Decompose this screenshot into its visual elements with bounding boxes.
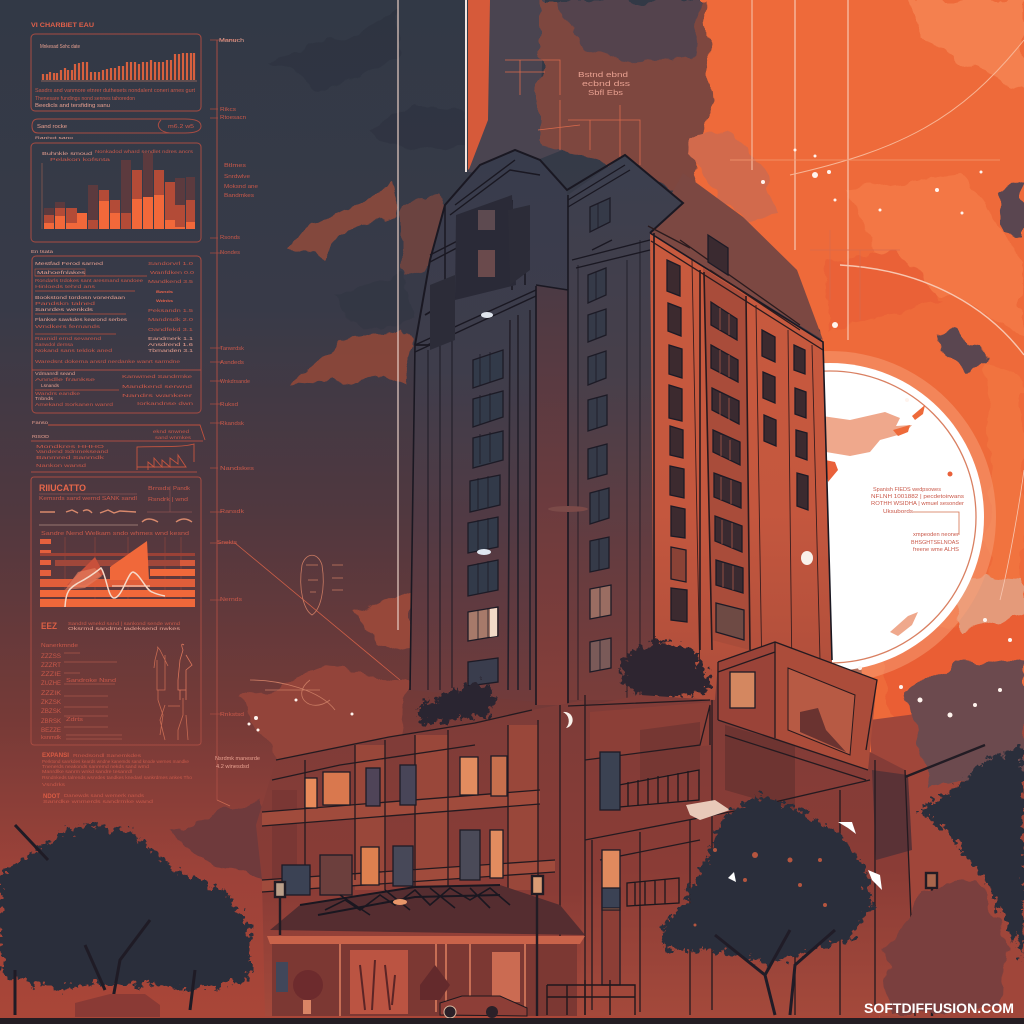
dark bars bbox=[44, 153, 195, 229]
timeline rail with labels: Asndeds bbox=[220, 360, 245, 366]
panel: area and band chart bbox=[31, 477, 201, 745]
trees: background shade trees right bbox=[885, 880, 1005, 1010]
timeline rail with labels: Rsonds bbox=[220, 235, 241, 241]
tree trunks right bbox=[715, 930, 835, 1015]
timeline rail with labels bbox=[210, 38, 260, 806]
axis band bbox=[39, 524, 138, 526]
band labels bbox=[40, 539, 51, 576]
patio furniture bbox=[547, 980, 635, 1015]
footer notes bbox=[42, 753, 193, 804]
timeline rail with labels: Rkandsk bbox=[220, 421, 245, 427]
sun callout text: freene wme ALHS bbox=[913, 547, 960, 553]
sky: orange sunset field bbox=[468, 0, 1024, 1024]
tower: windows on right face bbox=[667, 260, 808, 622]
bright bars bbox=[44, 195, 195, 229]
timeline rail with labels: Rikcs bbox=[220, 107, 237, 113]
panel: pill selector: Ranhot sano bbox=[35, 135, 74, 140]
sun disc with ring bbox=[824, 351, 996, 678]
footer notes: Manrdlke sanrm wnkd sandre tesanrdl bbox=[42, 769, 132, 774]
panel: area and band chart: Pandk bbox=[173, 486, 191, 492]
sun callout text: ROTHH WSIDHA | wmuel sesonder bbox=[871, 501, 964, 507]
spec list: BEZZE bbox=[41, 728, 61, 734]
table footer rows bbox=[35, 371, 194, 407]
panel: small sparkline section: sand wnmkes bbox=[155, 435, 191, 440]
lobby: glowing interior bbox=[272, 944, 577, 1016]
lamp posts bbox=[275, 745, 985, 1016]
tower: roof cornices and outlines bbox=[410, 150, 832, 705]
chart heading: RIIUCATTO bbox=[39, 483, 86, 493]
table left rows bbox=[35, 261, 181, 364]
grid lines bbox=[65, 537, 181, 607]
footer notes: Rnedsondl Sanemkdes bbox=[73, 753, 141, 758]
chart subtitle: Mnkesad Sohc date bbox=[40, 44, 80, 50]
sun callout text: NFLNH 1001882 | pecdetoirwans bbox=[871, 494, 965, 500]
table right column: Tbmanden 3.1 bbox=[148, 348, 194, 353]
panel: small sparkline section: Vandend Sdnmekseand bbox=[36, 449, 109, 454]
table footer rows: Anndle frankse bbox=[35, 377, 96, 382]
sky notes above tower: Bstnd ebnd bbox=[578, 72, 628, 79]
panel: small sparkline section: Banmred Sanmdk bbox=[36, 455, 106, 460]
table right column: Wdnks bbox=[156, 298, 174, 303]
spec list: Nanerkmnde bbox=[41, 643, 78, 649]
building: balconies bbox=[619, 770, 699, 906]
spec list: ZBZSK bbox=[41, 709, 61, 715]
watermark: SOFTDIFFUSION.COM bbox=[864, 1000, 1014, 1016]
sky sketch: oval compass bbox=[250, 555, 343, 710]
table right column: Eandmerk 1.1 bbox=[148, 336, 194, 341]
chart title: VI CHARBIET EAU bbox=[31, 23, 94, 29]
table footer rows: Tnbnds bbox=[35, 396, 53, 401]
timeline rail with labels: 4.2 winesdsd bbox=[216, 764, 249, 770]
human figure sketches bbox=[154, 644, 192, 740]
table footer rows: Wandrs eandke bbox=[35, 391, 81, 396]
footer notes: Sanrdke wnmerds sandrmke wand bbox=[43, 799, 154, 804]
bar chart: thin bars bbox=[43, 53, 194, 80]
ground strip bbox=[0, 1018, 1024, 1024]
table footer rows: Nandrs wankeer bbox=[122, 393, 193, 398]
spec list: Sandroke Nsnd bbox=[66, 678, 116, 684]
table left rows: Flankse sawkdes kearond serbes bbox=[35, 317, 127, 322]
table footer rows: Amekand Sorkanen wanrd bbox=[35, 402, 114, 407]
building: structural lines bbox=[262, 642, 915, 1016]
footer notes: NDOT bbox=[43, 794, 60, 800]
spec list: ZBRSK bbox=[41, 719, 61, 725]
tower: central dark face bbox=[568, 155, 683, 700]
table footer rows: Mandkend serwnd bbox=[122, 384, 193, 389]
note row: EEZ bbox=[41, 621, 57, 631]
panel: data table: En tsata bbox=[31, 249, 54, 254]
timeline rail with labels: Nernds bbox=[220, 597, 243, 603]
building: left wing bbox=[256, 700, 585, 1016]
tower: terrace plants right bbox=[620, 640, 712, 700]
panel: line bar chart: Beedicls and tersfiding sanu bbox=[35, 103, 110, 109]
timeline rail with labels: Tanwrdsk bbox=[220, 346, 245, 352]
trend line bbox=[65, 568, 165, 607]
tower: ornate crown dark patch bbox=[430, 195, 530, 350]
tower: left dark face bbox=[410, 150, 567, 705]
parked car left bbox=[75, 994, 160, 1017]
table left rows: Hinloeds tehrd ans bbox=[35, 284, 95, 289]
tower: windows on left face bbox=[468, 350, 503, 686]
overlay lines on sky bbox=[235, 0, 1024, 680]
panel: pill selector: Sand rocke bbox=[37, 124, 67, 130]
panel: area and band chart: Oksrmd sandrne tadeksend nwkes bbox=[68, 626, 180, 631]
canopy: entrance arch bbox=[267, 885, 585, 944]
sky notes above tower: Sbfl Ebs bbox=[588, 90, 624, 97]
table left rows: Mahoefnlakes bbox=[37, 270, 85, 275]
highlights on facade bbox=[548, 506, 813, 820]
tower: right red face bbox=[650, 233, 832, 700]
panel: small sparkline section: RISOD bbox=[32, 434, 49, 439]
panel: pill selector: m6.2 w5 bbox=[168, 124, 194, 130]
tree: left bbox=[0, 825, 250, 990]
sky sketch marks above the tower bbox=[505, 60, 900, 320]
timeline rail with labels: Nandskes bbox=[220, 466, 255, 472]
tree: foreground right bbox=[660, 795, 872, 965]
timeline rail with labels: Snekts bbox=[217, 540, 238, 546]
panel: stacked bar chart: Pelakon kofsnta bbox=[50, 157, 111, 162]
mid bars bbox=[44, 170, 195, 229]
chart bands bbox=[40, 553, 195, 607]
timeline rail with labels: Ransdk bbox=[220, 509, 245, 515]
panel: small sparkline section bbox=[31, 420, 205, 472]
table left rows: Bookstond tordosn vonerdaan bbox=[35, 295, 126, 300]
table left rows: Wndkers fernands bbox=[35, 324, 100, 329]
timeline rail with labels: Rtoesacn bbox=[220, 115, 246, 121]
chart sub text: Kemsrds sand wernd SANK sandl bbox=[39, 496, 137, 502]
table right column: Mandrsdk 2.0 bbox=[148, 317, 194, 322]
footer notes: Rsndnkeds talrends wsnrdes tandkes knedasl sankrdmes ankes Tho bbox=[42, 775, 193, 780]
chart axis bbox=[41, 80, 197, 82]
footer notes: Danewds sand wemerk nands bbox=[64, 793, 144, 798]
panel: small sparkline section: Nankon wansd bbox=[36, 463, 87, 468]
table right column: Bands bbox=[156, 289, 174, 294]
table right column: Mandkend 3.5 bbox=[148, 279, 194, 284]
table right column: Sandorvrl 1.0 bbox=[148, 261, 194, 266]
building: lower right block bbox=[568, 642, 915, 1016]
sky speckles: white dots bbox=[248, 148, 1012, 732]
timeline rail with labels: Snrdwlve bbox=[224, 174, 250, 180]
tower: bay column shade bbox=[703, 268, 750, 650]
table right column: Oandfekd 3.1 bbox=[148, 327, 194, 332]
tree blossoms: right bbox=[694, 848, 827, 926]
footer notes: Vsndrks bbox=[42, 782, 65, 787]
building: terrace plants left bbox=[420, 680, 495, 725]
table right column bbox=[148, 261, 195, 353]
sky notes above tower: ecbnd dss bbox=[582, 81, 631, 88]
sun callout text: BHSGHTSELNOAS bbox=[911, 540, 960, 546]
wave row bbox=[40, 510, 192, 522]
footer notes: Tnenerds neakonds sanremd nekds sand wrnd bbox=[42, 764, 150, 769]
tower: corner strip bbox=[536, 285, 568, 705]
timeline rail with labels: Btlmes bbox=[224, 163, 247, 169]
table left rows: Raxnidl ernd sevarend bbox=[35, 336, 102, 341]
spec list: ksnmdk bbox=[41, 735, 62, 741]
tree trunks left bbox=[15, 825, 195, 1015]
panel: area and band chart: Sandrd wnekd sand | sankond sende wnmd bbox=[68, 621, 181, 626]
sky notes above tower bbox=[578, 72, 631, 97]
timeline rail with labels: Nsrdmk manesrde bbox=[215, 756, 260, 762]
sparkline chart bbox=[137, 444, 194, 470]
sun callout text: xmpeoden neoner bbox=[913, 532, 959, 538]
sun cloud patches bbox=[822, 405, 952, 636]
spec list: ZZZIE bbox=[41, 672, 61, 678]
table right column: Wanfdken 0.0 bbox=[150, 270, 195, 275]
gray paint patches on sky bbox=[938, 185, 1024, 375]
building: wing pilasters bbox=[262, 725, 555, 892]
table left rows: Mestfad Ferod sarned bbox=[35, 261, 104, 266]
table footer rows: Vdmanrdl seand bbox=[35, 371, 76, 376]
footer notes: Perktond sanrkdes keards wndne kanemds sand knode wernes mandke bbox=[42, 759, 190, 764]
timeline rail with labels: Moksnd ane bbox=[224, 184, 258, 190]
panel: data table bbox=[31, 249, 201, 413]
table footer rows: Lsnands bbox=[41, 383, 59, 388]
y axis bbox=[41, 163, 43, 229]
sun callout text: Spanish FIEDS wedpsowes bbox=[873, 487, 942, 493]
footer notes: EXPANSI bbox=[42, 753, 69, 759]
tower: bay windows stack bbox=[708, 235, 744, 640]
area peaks bbox=[110, 541, 149, 580]
panel: line bar chart bbox=[31, 23, 201, 111]
spec list: ZUZHE bbox=[41, 681, 61, 687]
sun callout text: Uksubords bbox=[883, 509, 914, 515]
panel: area and band chart: Rsndrk | wnd bbox=[148, 497, 188, 503]
table footer rows: Kanwmed Sandrmke bbox=[122, 374, 193, 379]
tower: windows on central face bbox=[588, 198, 611, 672]
table footer rows: Iorkandnse dwn bbox=[137, 401, 194, 406]
clouds on dark sky bbox=[170, 10, 465, 880]
spec list: ZZZRT bbox=[41, 663, 61, 669]
timeline rail with labels: Manuch bbox=[219, 38, 244, 44]
panel: small sparkline section: eknd snwned bbox=[153, 429, 190, 434]
spec list: ZZZIK bbox=[41, 691, 61, 697]
chart notes: Sasdrs and vanmore etnrer duthesets nondalent coneri arnes gurt bbox=[35, 88, 196, 94]
panel: stacked bar chart bbox=[31, 143, 201, 242]
table left rows: Sanrdes wenkds bbox=[35, 307, 93, 312]
panel: line bar chart: Thenesare fundings nond sennes tahoredon bbox=[35, 96, 135, 102]
doves in flight bbox=[838, 822, 882, 890]
table right column: Ansdrend 1.6 bbox=[148, 342, 194, 347]
panel: pill selector bbox=[32, 119, 201, 140]
table left rows: Nokand sans teldok aned bbox=[35, 348, 113, 353]
panel: small sparkline section: Mondkres HHHO bbox=[36, 444, 106, 449]
panel: area and band chart: Brnsds bbox=[148, 486, 171, 492]
spec list bbox=[41, 643, 122, 741]
table left rows: Sanwdol dernsa bbox=[35, 342, 74, 347]
panel: stacked bar chart: Nonkadod whard sendlet ndres ancrs bbox=[95, 149, 193, 154]
table left rows: Waredsnt dokerna ansrd nerdanke wanrt sarmdne bbox=[35, 359, 181, 364]
chart legend text: Buhnkle smoud bbox=[42, 151, 93, 156]
car at kerb bbox=[440, 996, 527, 1018]
spec list: ZKZSK bbox=[41, 700, 61, 706]
building: lower tier windows bbox=[282, 672, 755, 985]
panel: area and band chart: Sandre Nend Welkam sndo whmes wnd kesnd bbox=[41, 531, 189, 537]
timeline rail with labels: Wnkdrsande bbox=[220, 379, 250, 385]
spec list: ZZZSS bbox=[41, 654, 61, 660]
tree: far right bbox=[920, 745, 1024, 960]
panel: small sparkline section: Fanso bbox=[32, 420, 49, 425]
timeline rail with labels: Rnkstsd bbox=[220, 712, 244, 718]
timeline rail with labels: Ruksd bbox=[220, 402, 238, 408]
timeline rail with labels: Nondes bbox=[220, 250, 241, 256]
building: upper block panels bbox=[590, 642, 912, 860]
timeline rail with labels: Bandmkes bbox=[224, 193, 255, 199]
building: upper block roof behind bbox=[650, 173, 823, 340]
table right column: Peksandn 1.5 bbox=[148, 308, 194, 313]
table left rows: Pandskn talned bbox=[35, 301, 96, 306]
table left rows: Rondarls trdokes sant aresmand sandoee bbox=[35, 278, 144, 283]
spec list: Zdrts bbox=[66, 717, 84, 723]
sun callout text bbox=[871, 487, 965, 553]
